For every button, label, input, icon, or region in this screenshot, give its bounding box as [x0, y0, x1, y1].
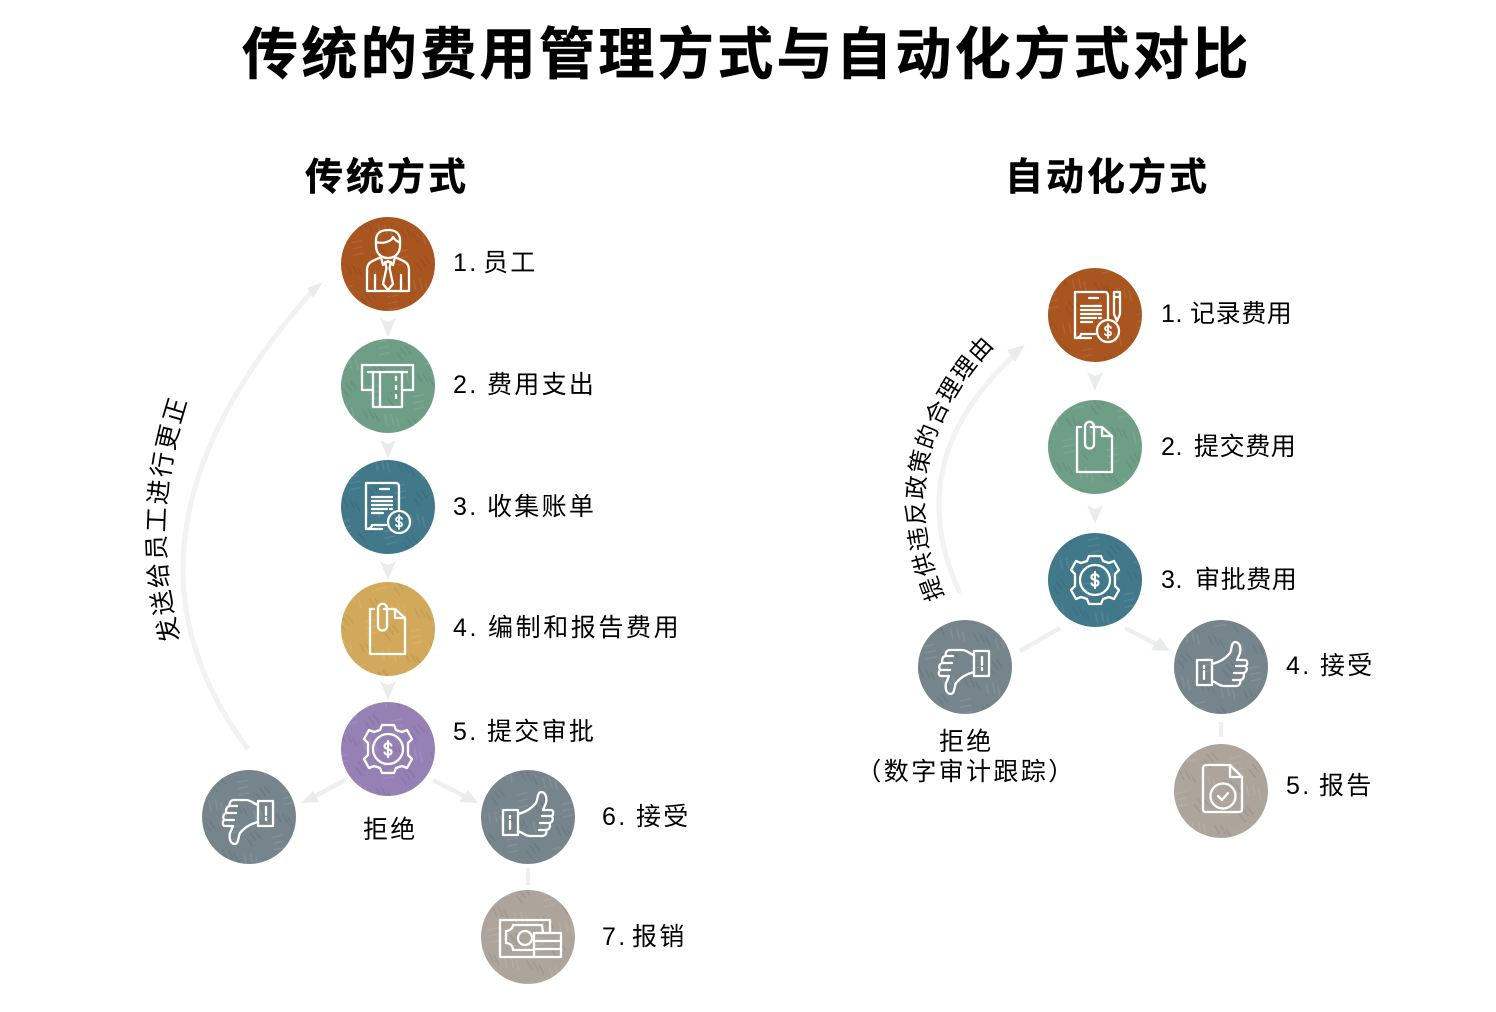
- label: 接受: [636, 803, 691, 831]
- arrow: justification loop: [939, 345, 1025, 593]
- auto step 3 approve: [1048, 533, 1142, 627]
- reject: [202, 770, 296, 864]
- label: 4.: [453, 614, 479, 642]
- title: 传统的费用管理方式与自动化方式对比: [242, 23, 1252, 86]
- label: 接受: [1320, 652, 1375, 680]
- arrow: [380, 681, 396, 700]
- curved text: justification: 提供违反政策的合理理由: [904, 338, 994, 602]
- label: audit trail: （数字审计跟踪）: [856, 758, 1076, 786]
- label: 提交审批: [487, 718, 596, 746]
- icon: document with pen: [1075, 292, 1120, 342]
- curved text: correction: 发送给员工进行更正: [145, 398, 188, 641]
- icon: money: [500, 920, 561, 957]
- icon: thumb down: [223, 800, 273, 844]
- auto accept: [1174, 620, 1268, 714]
- label: 2.: [453, 371, 478, 399]
- step 5 submit: [341, 702, 435, 796]
- label: 报告: [1319, 772, 1374, 800]
- auto step 2 submit: [1048, 400, 1142, 494]
- label: 审批费用: [1195, 566, 1297, 594]
- label: 3.: [1161, 566, 1183, 594]
- step 4 report: [341, 582, 435, 676]
- arrow: to accept: [1125, 628, 1170, 651]
- label: 2.: [1161, 433, 1183, 461]
- label: 报销: [632, 923, 687, 951]
- heading: automated: 自动化方式: [1005, 157, 1210, 199]
- icon: gear: [364, 725, 412, 773]
- reimburse: [481, 890, 575, 984]
- icon: employee: [367, 230, 409, 291]
- label: 3.: [453, 493, 478, 521]
- auto reject: [918, 620, 1012, 714]
- arrow: [1087, 372, 1103, 391]
- step 2 expense: [341, 339, 435, 433]
- arrow: to accept: [433, 780, 478, 803]
- label: 费用支出: [487, 371, 596, 399]
- label: 编制和报告费用: [488, 614, 681, 642]
- icon: document: [366, 483, 410, 533]
- label: 4.: [1286, 652, 1311, 680]
- connector: [526, 868, 530, 885]
- auto report: [1174, 744, 1268, 838]
- label: 6.: [602, 803, 627, 831]
- label: 提交费用: [1194, 433, 1296, 461]
- connector: to reject: [1020, 628, 1060, 651]
- icon: thumb up: [503, 792, 553, 836]
- label: 5.: [1286, 772, 1311, 800]
- heading: traditional: 传统方式: [305, 157, 469, 199]
- label: 员工: [483, 249, 538, 277]
- icon: clip: [370, 604, 405, 654]
- step 1 employee: [341, 217, 435, 311]
- icon: gear: [1071, 556, 1119, 604]
- icon: thumb down: [939, 650, 989, 694]
- label: 收集账单: [487, 493, 596, 521]
- arrow: [380, 561, 396, 580]
- step 3 receipts: [341, 460, 435, 554]
- label: 1.: [1161, 300, 1183, 328]
- icon: thumb up: [1197, 642, 1247, 686]
- arrow: [380, 318, 396, 337]
- label: 拒绝: [363, 816, 418, 844]
- arrow: to reject: [301, 780, 345, 803]
- label: 1.: [453, 249, 478, 277]
- label: 5.: [453, 718, 478, 746]
- connector: [1219, 722, 1223, 737]
- auto step 1 record: [1048, 268, 1142, 362]
- icon: report: [1203, 765, 1242, 812]
- accept: [481, 770, 575, 864]
- icon: clip: [1077, 422, 1112, 472]
- label: 7.: [602, 923, 627, 951]
- label: reject: 拒绝: [939, 728, 994, 756]
- arrow: correction loop: [183, 282, 323, 749]
- arrow: [1087, 505, 1103, 524]
- icon: atm: [362, 365, 413, 407]
- label: 记录费用: [1190, 300, 1292, 328]
- arrow: [380, 440, 396, 459]
